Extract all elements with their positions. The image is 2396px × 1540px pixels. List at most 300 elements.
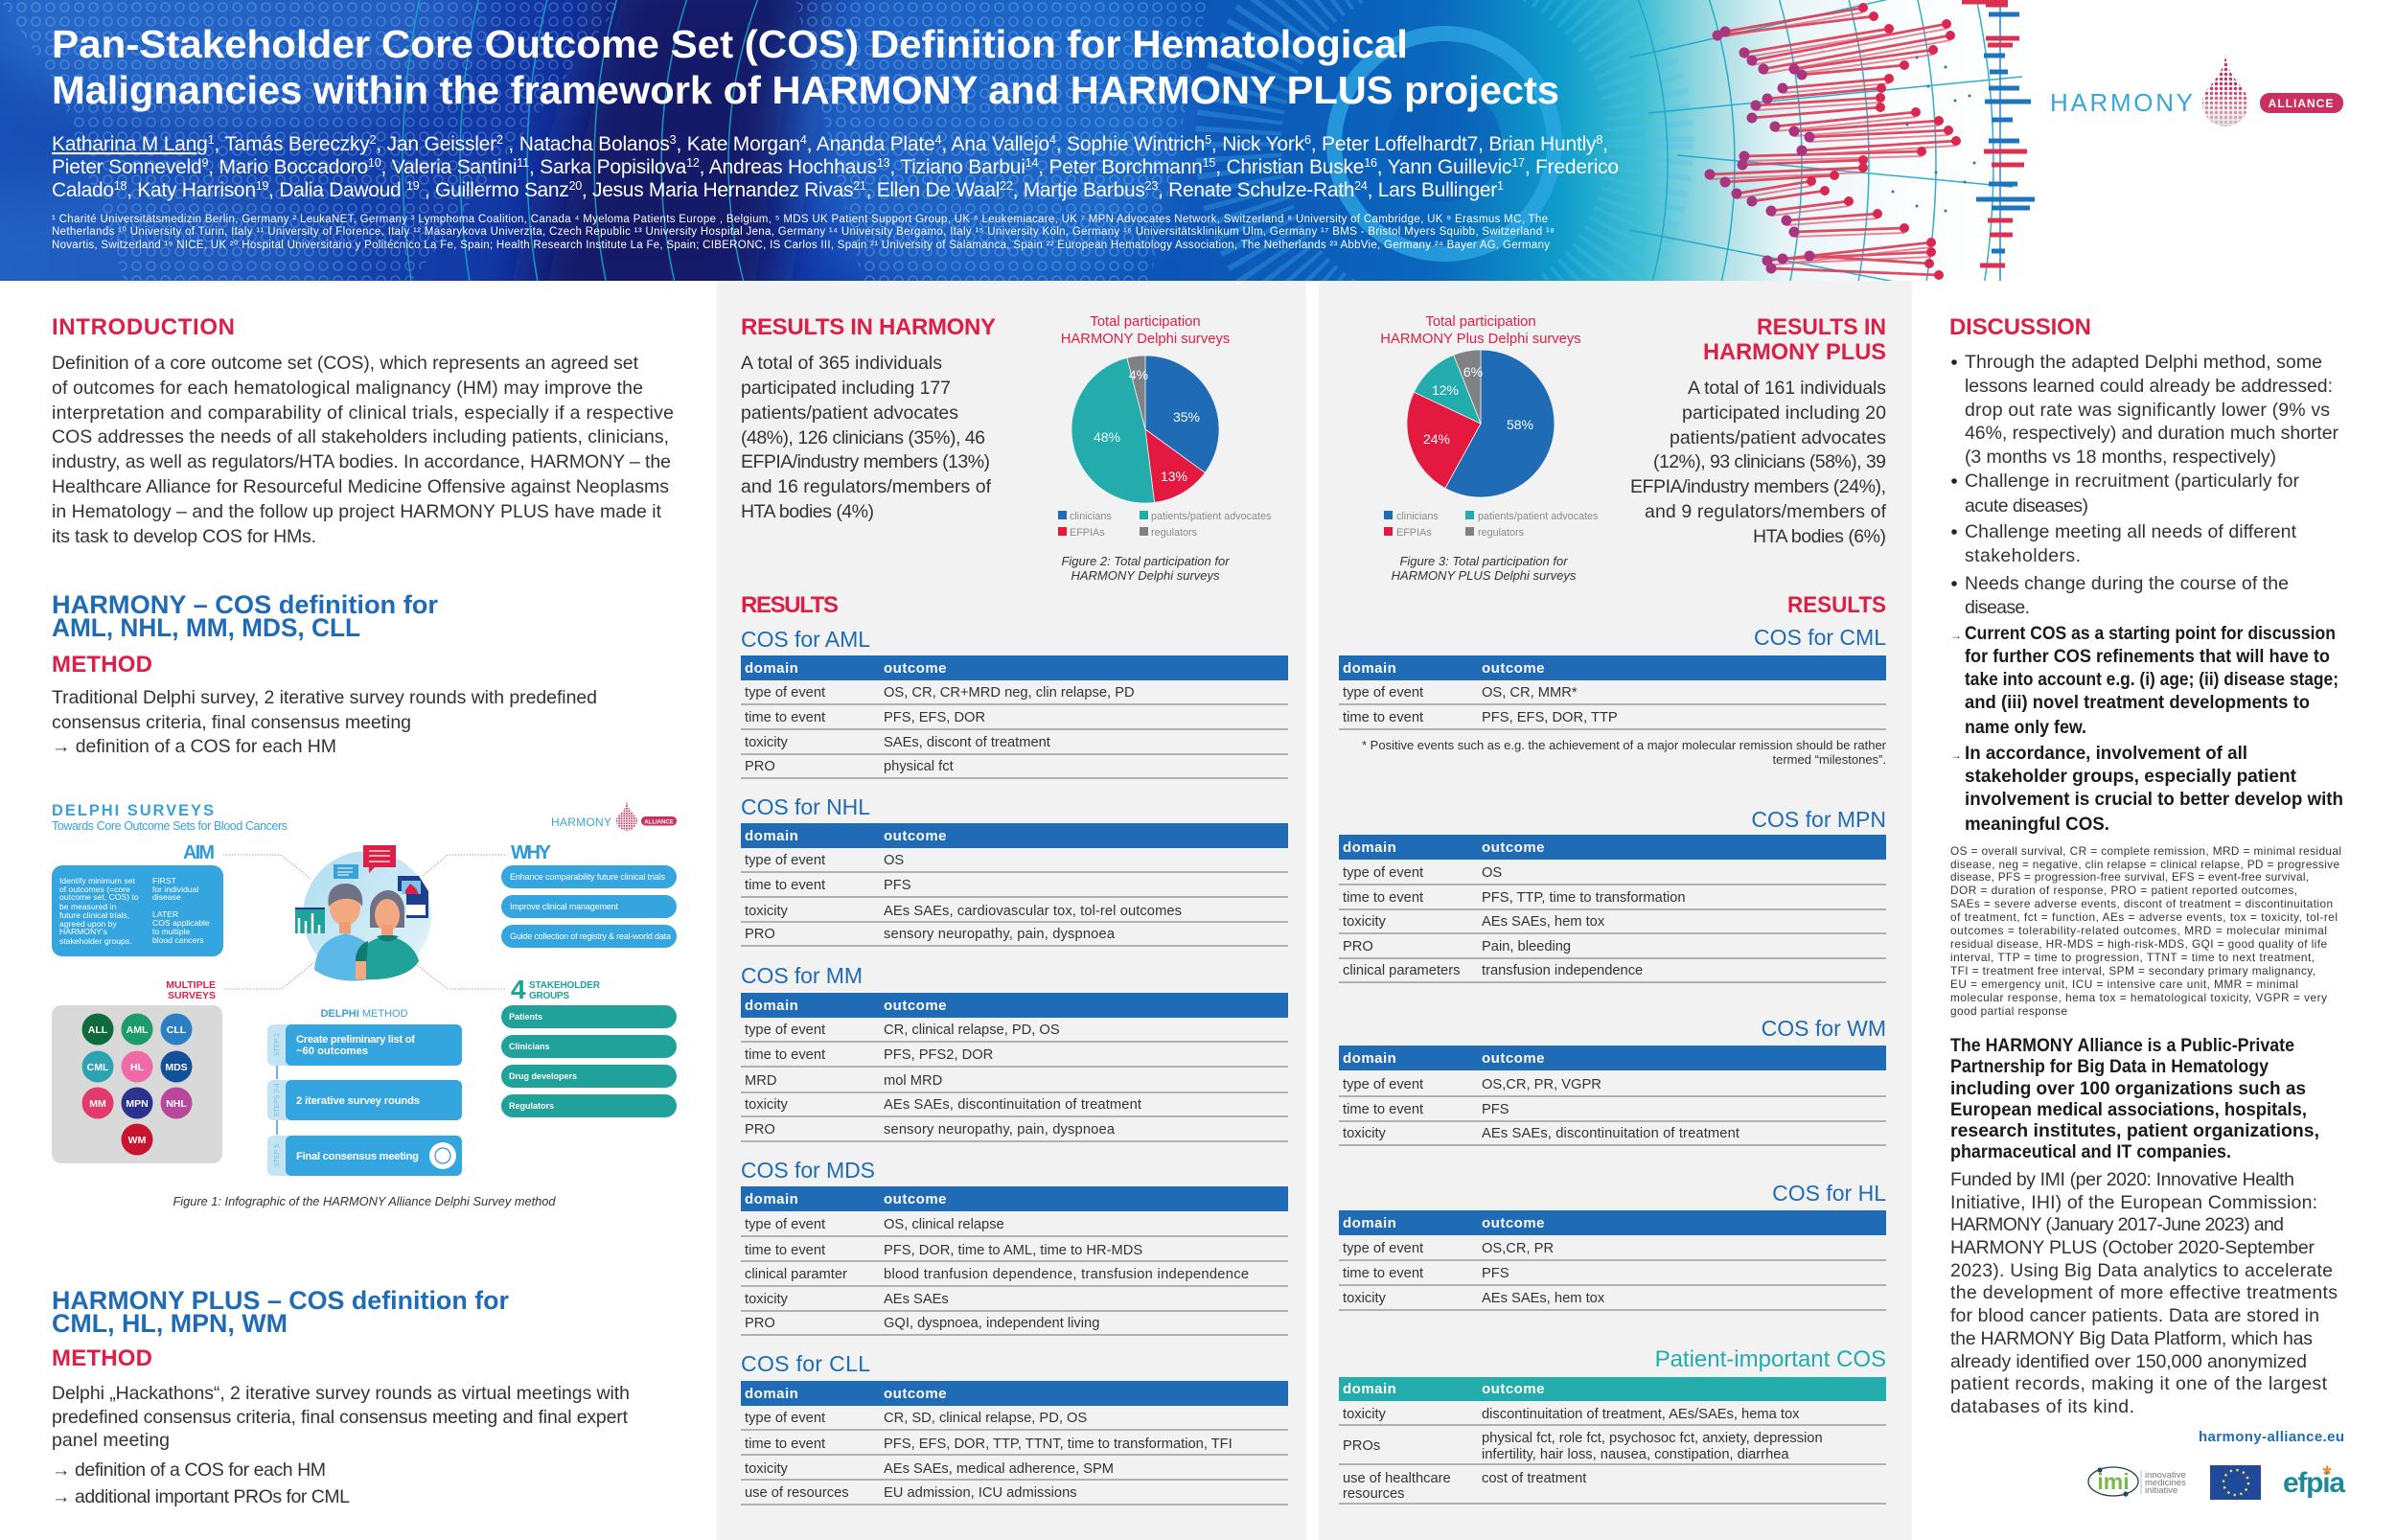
aim box: be measured in [59, 902, 116, 911]
heading: results in HARMONY: RESULTS IN HARMONY [741, 314, 996, 340]
aim box: blood cancers [152, 935, 204, 945]
icon: document [398, 876, 428, 918]
chart: HARMONY participation pie: 13% [1161, 469, 1187, 484]
table: COS for NHL: time to event [745, 878, 825, 893]
table: COS for AML: SAEs, discont of treatment [884, 735, 1050, 750]
text block: HARMONY Alliance statement: including over 100 organizations such as [1950, 1078, 2306, 1099]
logo: EU flag [2210, 1465, 2261, 1500]
table: COS for MPN: domain [1343, 839, 1396, 856]
heading: results in HARMONY PLUS: HARMONY PLUS [1703, 339, 1886, 365]
text block: funding: the HARMONY Big Data Platform, which has [1950, 1328, 2313, 1349]
why boxes: Enhance comparability future clinical trials [510, 872, 665, 882]
text block: introduction: interpretation and comparability of clinical trials, especially if a respective [52, 402, 674, 424]
table: COS for MPN: AEs SAEs, hem tox [1482, 914, 1605, 930]
table: COS for NHL [741, 794, 1288, 946]
table: COS for CLL: COS for CLL [741, 1351, 870, 1376]
chart: HARMONY PLUS participation pie: 12% [1432, 382, 1459, 398]
heading: results right: RESULTS [1787, 592, 1886, 618]
aim heading: AIM [183, 842, 215, 863]
table: COS for HL: PFS [1482, 1266, 1509, 1281]
table: COS for MPN [1339, 807, 1886, 982]
text block: HARMONY method: Traditional Delphi survey, 2 iterative survey rounds with predefined [52, 687, 597, 708]
panel: disease circles: NHL [166, 1098, 187, 1110]
table: COS for CML: domain [1343, 660, 1396, 677]
text block: funding: HARMONY (January 2017-June 2023) and [1950, 1214, 2284, 1235]
text block: funding: already identified over 150,000 anonymized [1950, 1351, 2307, 1372]
authors: Pieter Sonneveld9, Mario Boccadoro10, Valeria Santini11, Sarka Popisilova12, Andreas Hochhaus13, Tiziano Barbui14, Peter Borchmann15, Christian Buske16, Yann Guillevic17, Frederico [52, 156, 1619, 178]
table: COS for HL: time to event [1343, 1266, 1423, 1281]
stakeholder groups heading [511, 975, 601, 1004]
text block: abbreviations: SAEs = severe adverse events, discont of treatment = discontinuitation [1950, 897, 2333, 910]
stakeholder boxes: Clinicians [509, 1042, 550, 1051]
text block: HARMONY Alliance statement: Partnership for Big Data in Hematology [1950, 1056, 2269, 1077]
table: COS for MPN: outcome [1482, 839, 1545, 856]
text block: HARMONY PLUS results: and 9 regulators/members of [1645, 501, 1887, 522]
title [52, 22, 1559, 112]
table: COS for MM [741, 963, 1288, 1141]
panel: disease circles: CML [87, 1062, 109, 1073]
footnote: * Positive events such as e.g. the achievement of a major molecular remission should be rather [1362, 738, 1887, 752]
heading: method plus: METHOD [52, 1345, 152, 1371]
table: COS for MM: domain [745, 998, 798, 1014]
table: COS for CLL: domain [745, 1386, 798, 1402]
Delphi steps [267, 1024, 462, 1176]
table: COS for MDS: clinical paramter [745, 1267, 847, 1282]
text block: discussion bullets: drop out rate was significantly lower (9% vs [1965, 400, 2330, 421]
heading: HARMONY PLUS COS definition [52, 1286, 509, 1338]
text block: discussion bullets: disease. [1965, 597, 2030, 618]
text block: HARMONY Alliance statement: The HARMONY Alliance is a Public-Private [1950, 1035, 2294, 1056]
infographic title [52, 802, 288, 833]
text block: introduction: in Hematology – and the follow up project HARMONY PLUS have made it [52, 501, 662, 522]
stakeholder groups heading: 4 [511, 975, 526, 1004]
text block: funding: the development of more effective treatments [1950, 1282, 2338, 1303]
table: COS for AML: time to event [745, 710, 825, 725]
figure 2 caption: HARMONY Delphi surveys [1071, 568, 1220, 583]
chart title [1061, 314, 1230, 347]
table: COS for HL: AEs SAEs, hem tox [1482, 1291, 1605, 1306]
aim box: for individual [152, 885, 198, 894]
table: patient-important COS: use of healthcare [1343, 1471, 1451, 1486]
table: patient-important COS: cost of treatment [1482, 1471, 1586, 1486]
logo: imi: innovative [2145, 1470, 2186, 1481]
panel: results in HARMONY background [717, 281, 1306, 1540]
panel: results in HARMONY PLUS background [1319, 281, 1912, 1540]
text block: abbreviations: good partial response [1950, 1004, 2067, 1018]
table: patient-important COS: discontinuitation of treatment, AEs/SAEs, hema tox [1482, 1407, 1800, 1422]
text block: HARMONY method: consensus criteria, final consensus meeting [52, 712, 411, 733]
chart: HARMONY participation pie: 48% [1094, 429, 1120, 445]
aim box: COS applicable [152, 918, 210, 928]
table: COS for WM: PFS [1482, 1102, 1509, 1117]
table: patient-important COS: Patient-important COS [1655, 1346, 1886, 1372]
title: Malignancies within the framework of HARMONY and HARMONY PLUS projects [52, 68, 1559, 112]
logo: small HARMONY [551, 800, 677, 831]
table: COS for MPN: clinical parameters [1343, 963, 1460, 978]
chart: HARMONY PLUS participation pie: 6% [1463, 364, 1483, 379]
website link text: harmony-alliance.eu [2199, 1429, 2344, 1445]
table: COS for MDS: COS for MDS [741, 1158, 875, 1183]
chart title: Total participation [1425, 314, 1536, 330]
text block: funding: patient records, making it one of the largest [1950, 1373, 2328, 1394]
text block: discussion conclusions: name only few. [1965, 717, 2086, 738]
text block: discussion bullets: Challenge in recruitment (particularly for [1965, 471, 2300, 492]
legend: regulators [1151, 527, 1198, 539]
table: COS for HL [1339, 1181, 1886, 1310]
table: COS for MPN: type of event [1343, 865, 1423, 881]
footnote [1362, 738, 1887, 767]
text block: abbreviations: OS = overall survival, CR = complete remission, MRD = minimal residual [1950, 844, 2341, 858]
logo: imi: initiative [2145, 1485, 2177, 1496]
table: COS for MM: PFS, PFS2, DOR [884, 1047, 993, 1063]
table: COS for WM: OS,CR, PR, VGPR [1482, 1077, 1601, 1092]
table: COS for MM: sensory neuropathy, pain, dyspnoea [884, 1122, 1116, 1138]
Delphi steps: 2 iterative survey rounds [296, 1095, 420, 1107]
text block: discussion conclusions: In accordance, involvement of all [1965, 743, 2247, 764]
text block: discussion bullets [1951, 352, 2338, 618]
aim box: disease [152, 892, 181, 902]
legend: regulators [1478, 527, 1525, 539]
table: COS for NHL: domain [745, 828, 798, 844]
footnote: termed “milestones”. [1773, 752, 1886, 767]
table: patient-important COS: outcome [1482, 1381, 1545, 1397]
table: COS for NHL: PRO [745, 927, 775, 942]
logo: efpia: efpia [2283, 1467, 2345, 1499]
table: COS for WM [1339, 1016, 1886, 1145]
text block: abbreviations: residual disease, HR-MDS = high-risk-MDS, GQI = good quality of life [1950, 937, 2327, 951]
figure 2 caption: Figure 2: Total participation for [1061, 554, 1230, 568]
logo: imi [2088, 1467, 2186, 1497]
stakeholder boxes: Drug developers [509, 1071, 577, 1081]
affiliations: Novartis, Switzerland ¹⁹ NICE, UK ²⁰ Hospital Universitario y Politécnico La Fe, Spain; Health Research Institute La Fe, Spain; CIBERONC, IS Carlos III, Spain ²¹ University of Salamanca, Spain ²² European Hematology Association, The Netherlands ²³ AbbVie, Germany ²⁴ Bayer AG, Germany [52, 240, 1550, 251]
heading: HARMONY COS definition: HARMONY – COS definition for [52, 590, 438, 619]
text block: introduction: industry, as well as regulators/HTA bodies. In accordance, HARMONY – the [52, 451, 671, 472]
text block: abbreviations: molecular response, hema tox = hematological toxicity, VGPR = very [1950, 991, 2327, 1004]
table: COS for CLL: EU admission, ICU admissions [884, 1485, 1077, 1501]
text block: discussion bullets: acute diseases) [1965, 495, 2088, 517]
table: COS for MDS: AEs SAEs [884, 1292, 949, 1307]
Delphi method heading: DELPHI METHOD [320, 1008, 408, 1020]
text block: introduction: COS addresses the needs of all stakeholders including patients, clinicians, [52, 426, 669, 448]
table: COS for CML: PFS, EFS, DOR, TTP [1482, 710, 1618, 725]
text block: introduction: Definition of a core outcome set (COS), which represents an agreed set [52, 353, 639, 374]
chart title: HARMONY Delphi surveys [1061, 332, 1230, 347]
text block: HARMONY PLUS results: EFPIA/industry members (24%), [1630, 476, 1886, 497]
text block: HARMONY PLUS results: HTA bodies (6%) [1753, 526, 1886, 547]
text block: abbreviations: outcomes = tolerability-related outcomes, MRD = molecular minimal [1950, 924, 2327, 937]
aim box: HARMONY's [59, 927, 107, 936]
legend [1058, 511, 1272, 539]
table: COS for HL: OS,CR, PR [1482, 1241, 1554, 1256]
aim box [52, 865, 223, 956]
figure 1 caption: Figure 1: Infographic of the HARMONY Alliance Delphi Survey method [173, 1194, 556, 1208]
text block: funding: 2023). Using Big Data analytics to accelerate [1950, 1260, 2333, 1281]
text block: HARMONY results: A total of 365 individuals [741, 353, 942, 374]
table: patient-important COS: resources [1343, 1486, 1405, 1502]
table: COS for MPN: PRO [1343, 939, 1373, 954]
figure 2 caption [1061, 554, 1230, 583]
panel: disease circles: MDS [165, 1062, 188, 1073]
heading: HARMONY COS definition: AML, NHL, MM, MDS, CLL [52, 613, 360, 642]
logo: small HARMONY: ALLIANCE [644, 820, 674, 826]
text block: abbreviations: DOR = duration of response, PRO = patient reported outcomes, [1950, 884, 2297, 897]
table: COS for MDS: time to event [745, 1243, 825, 1258]
panel: disease circles: AML [127, 1024, 149, 1036]
text block: introduction: of outcomes for each hematological malignancy (HM) may improve the [52, 378, 643, 399]
table: COS for NHL: toxicity [745, 904, 789, 919]
text block: HARMONY PLUS method: → definition of a COS for each HM [52, 1460, 326, 1481]
table: COS for MPN: time to event [1343, 890, 1423, 906]
Delphi steps: STEPS 2-4 [274, 1083, 281, 1117]
text block: funding: for blood cancer patients. Data are stored in [1950, 1305, 2319, 1326]
text block: HARMONY PLUS method [52, 1383, 630, 1507]
table: COS for NHL: outcome [884, 828, 947, 844]
text block: HARMONY PLUS results [1630, 378, 1887, 547]
illustration: two people with data [295, 845, 431, 981]
table: COS for MDS: outcome [884, 1191, 947, 1207]
authors: Katharina M Lang1, Tamás Bereczky2, Jan Geissler2 , Natacha Bolanos3, Kate Morgan4, Ananda Plate4, Ana Vallejo4, Sophie Wintrich5, Nick York6, Peter Loffelhardt7, Brian Huntly8, [52, 133, 1608, 155]
text block: discussion conclusions: stakeholder groups, especially patient [1965, 766, 2296, 787]
affiliations [52, 214, 1555, 251]
table: COS for MM: type of event [745, 1023, 825, 1038]
table: COS for MM: COS for MM [741, 963, 863, 988]
stakeholder groups heading: GROUPS [529, 991, 569, 1001]
text block: HARMONY results: EFPIA/industry members (13%) [741, 451, 990, 472]
logo: HARMONY Alliance: HARMONY [2050, 88, 2193, 117]
panel: disease circles [52, 1005, 222, 1163]
heading: method: METHOD [52, 652, 152, 678]
table: COS for NHL: sensory neuropathy, pain, dyspnoea [884, 927, 1116, 942]
aim box: of outcomes (=core [59, 885, 130, 894]
table: COS for CLL: time to event [745, 1437, 825, 1452]
table: COS for NHL: OS [884, 853, 904, 868]
table: COS for CLL: CR, SD, clinical relapse, PD, OS [884, 1411, 1087, 1426]
table: COS for MPN: transfusion independence [1482, 963, 1643, 978]
text block: discussion conclusions [1950, 623, 2343, 835]
table: COS for HL: outcome [1482, 1215, 1545, 1231]
table: COS for AML [741, 627, 1288, 778]
panel: disease circles: ALL [88, 1024, 108, 1036]
text block: abbreviations: of treatment, fct = function, AEs = adverse events, tox = toxicity, tol-rel [1950, 910, 2338, 924]
logo: small HARMONY: HARMONY [551, 816, 611, 829]
table: COS for MDS: PFS, DOR, time to AML, time to HR-MDS [884, 1243, 1142, 1258]
icon: blue note [334, 864, 358, 879]
table: COS for CLL: AEs SAEs, medical adherence, SPM [884, 1461, 1114, 1477]
text block: HARMONY results: and 16 regulators/members of [741, 476, 992, 497]
table: COS for CML: time to event [1343, 710, 1423, 725]
aim box: LATER [152, 909, 178, 919]
authors: Calado18, Katy Harrison19, Dalia Dawoud 19 , Guillermo Sanz20, Jesus Maria Hernandez Rivas21, Ellen De Waal22, Martje Barbus23, Renate Schulze-Rath24, Lars Bullinger1 [52, 179, 1504, 201]
text block: discussion conclusions: involvement is crucial to better develop with [1965, 789, 2343, 810]
figure 3 caption: HARMONY PLUS Delphi surveys [1392, 568, 1577, 583]
table: COS for NHL: AEs SAEs, cardiovascular tox, tol-rel outcomes [884, 904, 1182, 919]
text block: HARMONY results: patients/patient advocates [741, 402, 958, 424]
text block: abbreviations: EU = emergency unit, ICU = intensive care unit, MMR = minimal [1950, 977, 2298, 991]
text block: HARMONY Alliance statement: European medical associations, hospitals, [1950, 1099, 2307, 1120]
figure 3 caption [1392, 554, 1577, 583]
text block: abbreviations [1950, 844, 2341, 1018]
legend: clinicians [1396, 511, 1439, 522]
Delphi steps: STEP 1 [274, 1033, 281, 1056]
stakeholder boxes: Regulators [509, 1101, 554, 1111]
text block: introduction [52, 353, 674, 547]
chart title: Total participation [1090, 314, 1201, 330]
text block: HARMONY PLUS method: panel meeting [52, 1430, 170, 1451]
aim box: stakeholder groups. [59, 936, 131, 946]
text block: HARMONY method: → definition of a COS for each HM [52, 736, 336, 757]
table: COS for WM: type of event [1343, 1077, 1423, 1092]
header banner [0, 0, 2035, 281]
table: patient-important COS: physical fct, role fct, psychosoc fct, anxiety, depression [1482, 1431, 1823, 1446]
text block: abbreviations: TFI = treatment free interval, SPM = secondary primary malignancy, [1950, 964, 2315, 977]
chart title: HARMONY Plus Delphi surveys [1380, 332, 1581, 347]
legend: clinicians [1070, 511, 1112, 522]
table: COS for AML: OS, CR, CR+MRD neg, clin relapse, PD [884, 685, 1135, 701]
heading: results: RESULTS [741, 592, 839, 618]
text block: HARMONY PLUS method: predefined consensus criteria, final consensus meeting and final expert [52, 1407, 629, 1428]
affiliations: Netherlands ¹⁰ University of Turin, Italy ¹¹ University of Florence, Italy ¹² Masarykova Univerzita, Czech Republic ¹³ University Hospital Jena, Germany ¹⁴ University Bergamo, Italy ¹⁵ University Köln, Germany ¹⁶ Universitätsklinikum Ulm, Germany ¹⁷ BMS - Bristol Myers Squibb, Switzerland ¹⁸ [52, 226, 1555, 238]
table: patient-important COS: domain [1343, 1381, 1396, 1397]
table: COS for AML: toxicity [745, 735, 789, 750]
text block: HARMONY PLUS results: A total of 161 individuals [1688, 378, 1886, 399]
table: COS for MDS: toxicity [745, 1292, 789, 1307]
table: COS for MPN: PFS, TTP, time to transformation [1482, 890, 1686, 906]
text block: HARMONY results [741, 353, 992, 522]
text block: discussion conclusions: take into account e.g. (i) age; (ii) disease stage; [1965, 669, 2338, 690]
why boxes: Guide collection of registry & real-world data [510, 931, 671, 941]
heading: results in HARMONY PLUS: RESULTS IN [1757, 314, 1886, 340]
legend: patients/patient advocates [1478, 511, 1599, 522]
Delphi steps: ~60 outcomes [296, 1046, 368, 1057]
heading: HARMONY COS definition [52, 590, 438, 642]
text block: HARMONY PLUS method: Delphi „Hackathons“, 2 iterative survey rounds as virtual meetings with [52, 1383, 630, 1404]
logo: imi: medicines [2145, 1478, 2186, 1488]
table: COS for MDS: OS, clinical relapse [884, 1217, 1004, 1232]
text block: HARMONY method [52, 687, 597, 757]
logo: imi: imi [2097, 1469, 2130, 1494]
text block: HARMONY PLUS results: participated including 20 [1682, 402, 1886, 424]
table: COS for MDS: GQI, dyspnoea, independent living [884, 1316, 1099, 1331]
text block: discussion bullets: Through the adapted Delphi method, some [1965, 352, 2322, 373]
text block: abbreviations: disease, neg = negative, clin relapse = clinical relapse, PD = progressive [1950, 858, 2339, 871]
figure 3 caption: Figure 3: Total participation for [1399, 554, 1568, 568]
text block: discussion conclusions: Current COS as a starting point for discussion [1965, 623, 2336, 644]
table: COS for CLL: use of resources [745, 1485, 849, 1501]
table: COS for AML: domain [745, 660, 798, 677]
table: COS for AML: outcome [884, 660, 947, 677]
stakeholder boxes [501, 1005, 677, 1117]
text block: HARMONY PLUS results: (12%), 93 clinicians (58%), 39 [1653, 451, 1886, 472]
text block: HARMONY PLUS results: patients/patient advocates [1670, 427, 1886, 448]
stakeholder boxes: Patients [509, 1012, 542, 1022]
text block: discussion conclusions: meaningful COS. [1965, 814, 2109, 835]
text block: funding: Funded by IMI (per 2020: Innovative Health [1950, 1169, 2294, 1190]
multiple surveys heading [166, 979, 216, 1001]
logo: HARMONY Alliance: ALLIANCE [2269, 97, 2334, 110]
icon: bar chart [295, 908, 325, 933]
aim box: Identify minimum set [59, 876, 135, 885]
table: COS for MM: CR, clinical relapse, PD, OS [884, 1023, 1060, 1038]
table: patient-important COS [1339, 1346, 1886, 1504]
panel: disease circles: MPN [126, 1098, 149, 1110]
infographic title: Towards Core Outcome Sets for Blood Cancers [52, 819, 288, 833]
text block: discussion conclusions: for further COS refinements that will have to [1965, 646, 2330, 667]
affiliations: ¹ Charité Universitätsmedizin Berlin, Germany ² LeukaNET, Germany ³ Lymphoma Coalition, Canada ⁴ Myeloma Patients Europe , Belgium, ⁵ MDS UK Patient Support Group, UK ⁶ Leukemiacare, UK ⁷ MPN Advocates Network, Switzerland ⁸ University of Cambridge, UK ⁹ Erasmus MC, The [52, 214, 1548, 225]
table: COS for MM: toxicity [745, 1097, 789, 1113]
panel: disease circles: MM [89, 1098, 106, 1110]
panel: disease circles: WM [128, 1135, 147, 1146]
legend: patients/patient advocates [1151, 511, 1272, 522]
chart: HARMONY participation pie: 4% [1129, 367, 1148, 382]
table: COS for AML: COS for AML [741, 627, 870, 652]
text block: discussion bullets: stakeholders. [1965, 545, 2081, 566]
logo: HARMONY Alliance [2050, 55, 2343, 126]
panel: disease circles: CLL [167, 1024, 187, 1036]
table: COS for CLL: PFS, EFS, DOR, TTP, TTNT, time to transformation, TFI [884, 1437, 1233, 1452]
heading: results in HARMONY PLUS [1703, 314, 1886, 365]
chart: HARMONY participation pie [1058, 314, 1272, 539]
chart title [1380, 314, 1581, 347]
table: COS for WM: time to event [1343, 1102, 1423, 1117]
table: COS for HL: COS for HL [1772, 1181, 1886, 1206]
table: COS for MM: MRD [745, 1073, 776, 1089]
legend: EFPIAs [1396, 527, 1432, 539]
text block: HARMONY PLUS method: → additional important PROs for CML [52, 1486, 350, 1507]
table: COS for MM: mol MRD [884, 1073, 942, 1089]
panel: disease circles: HL [130, 1062, 145, 1073]
text block: discussion bullets: 46%, respectively) and duration much shorter [1965, 423, 2338, 444]
multiple surveys heading: MULTIPLE [166, 979, 216, 991]
legend [1384, 511, 1599, 539]
table: COS for WM: AEs SAEs, discontinuitation of treatment [1482, 1126, 1739, 1141]
infographic title: DELPHI SURVEYS [52, 802, 214, 819]
table: COS for MPN: toxicity [1343, 914, 1387, 930]
table: COS for MDS: type of event [745, 1217, 825, 1232]
table: COS for HL: domain [1343, 1215, 1396, 1231]
text block: abbreviations: disease, PFS = progression-free survival, EFS = event-free survival, [1950, 870, 2309, 884]
table: COS for MDS: domain [745, 1191, 798, 1207]
why boxes [501, 865, 677, 948]
chart: HARMONY PLUS participation pie [1380, 314, 1599, 539]
table: COS for MPN: Pain, bleeding [1482, 939, 1571, 954]
table: patient-important COS: PROs [1343, 1438, 1380, 1454]
text block: introduction: Healthcare Alliance for Resourceful Medicine Offensive against Neoplasms [52, 476, 669, 497]
table: COS for AML: PFS, EFS, DOR [884, 710, 985, 725]
text block: discussion bullets: lessons learned could already be addressed: [1965, 376, 2333, 397]
table: COS for CML: OS, CR, MMR* [1482, 685, 1578, 701]
aim box: future clinical trials, [59, 910, 129, 920]
table: COS for MDS: PRO [745, 1316, 775, 1331]
table: COS for MDS [741, 1158, 1288, 1335]
text block: discussion conclusions: → [1950, 629, 1962, 642]
table: COS for MM: AEs SAEs, discontinuitation of treatment [884, 1097, 1141, 1113]
why boxes: Improve clinical management [510, 902, 618, 911]
chart: HARMONY participation pie: 35% [1173, 409, 1200, 425]
table: COS for CLL [741, 1351, 1288, 1505]
table: COS for WM: domain [1343, 1050, 1396, 1067]
heading: HARMONY PLUS COS definition: CML, HL, MPN, WM [52, 1309, 288, 1338]
table: COS for WM: toxicity [1343, 1126, 1387, 1141]
title: Pan-Stakeholder Core Outcome Set (COS) Definition for Hematological [52, 22, 1408, 66]
aim box: to multiple [152, 927, 190, 936]
legend: EFPIAs [1070, 527, 1105, 539]
table: COS for AML: type of event [745, 685, 825, 701]
text block: funding: HARMONY PLUS (October 2020-September [1950, 1237, 2315, 1258]
table: patient-important COS: infertility, hair loss, nausea, constipation, diarrhea [1482, 1447, 1789, 1462]
table: COS for CML: COS for CML [1754, 625, 1886, 650]
table: COS for AML: PRO [745, 759, 775, 774]
table: COS for CML: outcome [1482, 660, 1545, 677]
